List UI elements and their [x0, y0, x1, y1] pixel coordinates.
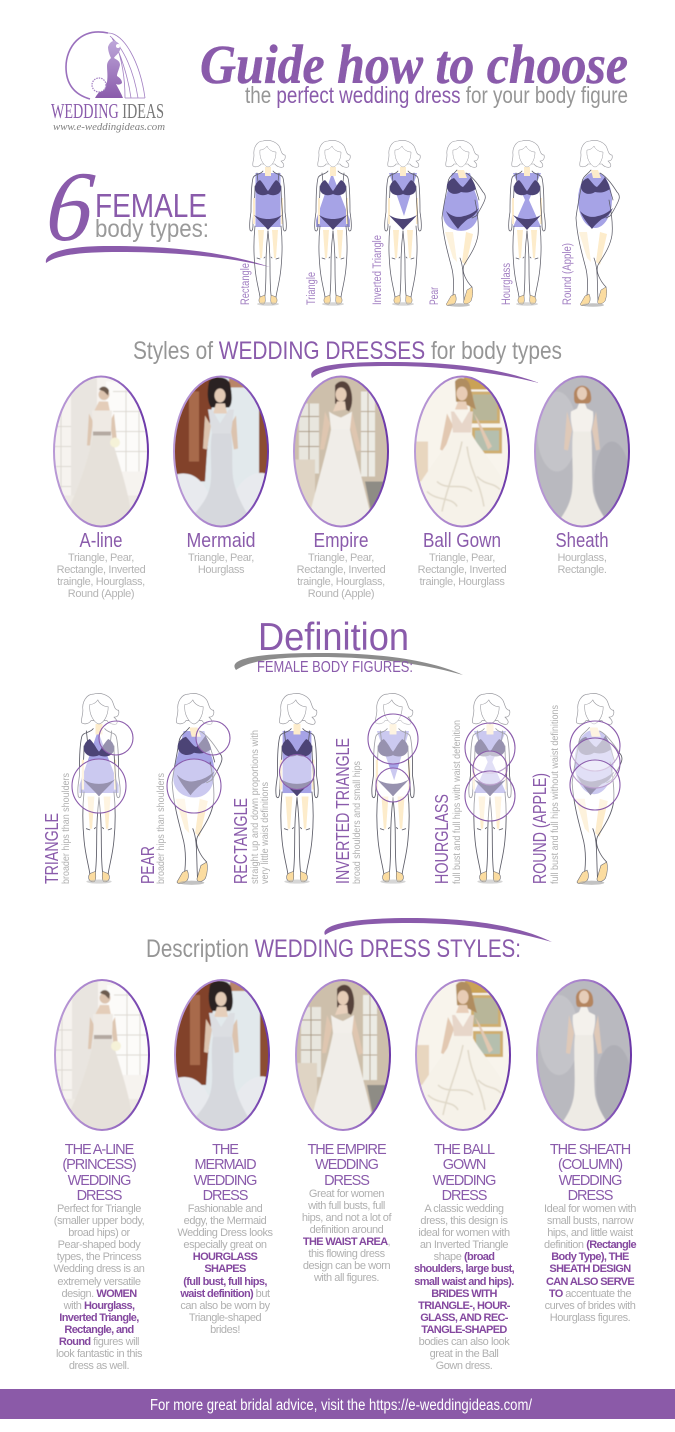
text: sheath description: Hourglass figures. [550, 1312, 631, 1324]
figure: round (apple) [576, 140, 619, 307]
text: a-line description: THE A-LINE [65, 1142, 135, 1158]
text: mermaid description: SHAPES [204, 1263, 246, 1275]
text: ball gown description: ideal for women with [418, 1227, 510, 1239]
text: sheath description: THE SHEATH [550, 1142, 631, 1158]
text: a-line: traingle, Hourglass, [57, 576, 145, 588]
text: empire description: definition around [310, 1224, 384, 1236]
text: ball gown description: shape (broad [434, 1251, 494, 1263]
text: sheath description: (COLUMN) [558, 1157, 622, 1173]
icon: bride silhouette in oval [66, 32, 145, 99]
panel: dress styles row [53, 376, 630, 600]
title: Guide how to choose [200, 34, 628, 95]
label: inverted triangle: Inverted Triangle [372, 235, 384, 305]
text: ball gown description: dress, this design is [420, 1215, 509, 1227]
text: mermaid description: brides! [210, 1324, 240, 1336]
text: empire description: DRESS [324, 1173, 369, 1189]
text: empire description: WEDDING [315, 1157, 379, 1173]
text: sheath description: TO accentuate the [549, 1288, 631, 1300]
label: rectangle: Rectangle [240, 263, 252, 305]
text: mermaid description: MERMAID [194, 1157, 256, 1173]
text: mermaid description [177, 1142, 274, 1336]
photo: mermaid dress [174, 979, 270, 1132]
label: pear definition [138, 773, 167, 884]
text: empire: Empire [314, 530, 368, 552]
label: pear definition: broader hips than shoulders [155, 773, 167, 884]
photo: a-line dress [53, 376, 149, 528]
figure: triangle [315, 140, 351, 306]
figure: hourglass [509, 140, 545, 306]
text: mermaid description: THE [212, 1142, 239, 1158]
label: round (apple): Round (Apple) [562, 243, 574, 305]
label: pear: Pear [429, 287, 441, 305]
text: a-line description: with Hourglass, [63, 1300, 135, 1312]
text: mermaid [186, 530, 256, 576]
text: empire description: Great for women [309, 1188, 384, 1200]
text: ball gown description: shoulders, large bust, [414, 1263, 515, 1275]
text: ball gown: Triangle, Pear, [429, 552, 495, 564]
text: ball gown description: WEDDING [433, 1173, 496, 1189]
panel: body figure definitions [42, 693, 622, 885]
label: round apple definition: full bust and full hips without waist definitions [549, 705, 561, 884]
figure: inverted triangle with circles [368, 693, 418, 884]
text: empire description: THE WAIST AREA, [303, 1236, 390, 1248]
label: round apple definition [530, 705, 561, 884]
figure: rectangle [250, 140, 286, 306]
text: ball gown description: A classic wedding [424, 1203, 504, 1215]
label: hourglass definition [432, 720, 463, 884]
text: empire description: with full busts, full [307, 1200, 385, 1212]
text: a-line description: look fantastic in this [56, 1348, 143, 1360]
text: mermaid description: (full bust, full hips, [183, 1276, 267, 1288]
text: mermaid: Triangle, Pear, [188, 552, 254, 564]
text: mermaid description: especially great on [183, 1239, 267, 1251]
label: hourglass: Hourglass [501, 263, 513, 305]
text: sheath: Hourglass, [557, 552, 607, 564]
label: pear definition: PEAR [138, 846, 158, 884]
text: empire: Rectangle, Inverted [297, 564, 386, 576]
text: a-line description: dress as well. [69, 1360, 130, 1372]
text: ball gown description: TRIANGLE-, HOUR- [418, 1300, 511, 1312]
text: a-line: Round (Apple) [68, 588, 134, 600]
text: empire: traingle, Hourglass, [297, 576, 385, 588]
figure: round apple with circles [570, 693, 622, 885]
heading: definition: FEMALE BODY FIGURES: [257, 659, 413, 676]
figure: pear with circles [167, 693, 230, 885]
figure: hourglass with circles [465, 693, 515, 884]
photo: sheath dress [534, 376, 630, 528]
label: triangle definition [42, 773, 72, 884]
heading: 6 female body types [35, 151, 270, 267]
text: a-line description: (smaller upper body, [54, 1215, 145, 1227]
text: empire description [302, 1142, 392, 1284]
text: empire: Triangle, Pear, [308, 552, 374, 564]
heading: 6 female body types: FEMALE [95, 187, 207, 224]
text: empire description: hips, and not a lot of [302, 1212, 392, 1224]
heading: styles of wedding dresses: Styles of WEDDING DRESSES for body types [133, 337, 562, 365]
text: a-line description: broad hips) or [68, 1227, 131, 1239]
heading: definition: Definition [258, 616, 409, 659]
text: a-line description: Pear-shaped body [58, 1239, 141, 1251]
photo: ball gown [414, 376, 510, 529]
text: a-line [57, 530, 146, 600]
text: ball gown description: GOWN [443, 1157, 486, 1173]
text: empire [297, 530, 386, 600]
photo: ball gown [415, 979, 511, 1132]
text: sheath description: DRESS [568, 1188, 613, 1204]
heading: 6 female body types: 6 [35, 151, 108, 262]
text: sheath description: Body Type), THE [551, 1251, 629, 1263]
label: hourglass definition: HOURGLASS [432, 794, 452, 884]
text: a-line description: DRESS [77, 1188, 122, 1204]
text: a-line description: Perfect for Triangle [57, 1203, 141, 1215]
text: ball gown description: Gown dress. [436, 1360, 493, 1372]
label: inverted triangle definition [333, 738, 363, 884]
text: empire: Round (Apple) [308, 588, 374, 600]
text: mermaid description: can also be worn by [180, 1300, 271, 1312]
photo: mermaid dress [173, 376, 269, 528]
label: triangle: Triangle [306, 272, 318, 305]
text: empire description: design can be worn [303, 1260, 390, 1272]
heading: description wedding dress styles: Description WEDDING DRESS STYLES: [146, 935, 521, 963]
text: empire description: with all figures. [313, 1272, 379, 1284]
text: mermaid description: Wedding Dress looks [177, 1227, 274, 1239]
heading: styles of wedding dresses [133, 337, 562, 383]
text: ball gown: Ball Gown [423, 530, 501, 552]
label: hourglass definition: full bust and full hips with waist defenition [451, 720, 463, 884]
figure: rectangle with circle [276, 693, 318, 884]
text: a-line: A-line [80, 530, 122, 552]
logo: Wedding Ideas [51, 32, 165, 133]
label: inverted triangle definition: broad shoulders and small hips [351, 761, 363, 884]
body figures row: six female body types [240, 140, 619, 307]
photo: empire dress [293, 376, 389, 528]
logo wordmark: WEDDING IDEAS [51, 99, 164, 123]
text: a-line description: Round figures will [59, 1336, 139, 1348]
label: rectangle definition [231, 730, 271, 884]
text: a-line description: design. WOMEN [61, 1288, 137, 1300]
footer band: For more great bridal advice, visit the https://e-weddingideas.com/ [150, 1397, 533, 1414]
text: mermaid description: Fashionable and [188, 1203, 263, 1215]
text: mermaid: Hourglass [198, 564, 245, 576]
text: a-line: Rectangle, Inverted [57, 564, 146, 576]
text: a-line description: Wedding dress is an [54, 1263, 145, 1275]
photo: empire dress [295, 979, 391, 1131]
text: a-line description [54, 1142, 145, 1372]
text: ball gown description: DRESS [442, 1188, 487, 1204]
text: ball gown description: GLASS, AND REC- [420, 1312, 509, 1324]
text: mermaid description: waist definition) but [179, 1288, 270, 1300]
text: empire description: THE EMPIRE [307, 1142, 387, 1158]
text: sheath description: CAN ALSO SERVE [546, 1276, 634, 1288]
label: triangle definition: broader hips than shoulders [60, 773, 72, 884]
text: mermaid: Mermaid [186, 530, 256, 552]
text: a-line description: extremely versatile [57, 1276, 141, 1288]
text: sheath description: WEDDING [559, 1173, 622, 1189]
text: sheath: Rectangle. [557, 564, 607, 576]
text: ball gown [418, 530, 507, 588]
text: ball gown description: bodies can also look [419, 1336, 510, 1348]
text: mermaid description: WEDDING [194, 1173, 257, 1189]
text: ball gown description: great in the Ball [430, 1348, 498, 1360]
text: a-line: Triangle, Pear, [68, 552, 134, 564]
text: sheath description: curves of brides with [545, 1300, 636, 1312]
text: ball gown: traingle, Hourglass [419, 576, 505, 588]
text: a-line description: Inverted Triangle, [59, 1312, 139, 1324]
label: round apple definition: ROUND (APPLE) [530, 773, 550, 884]
label: rectangle definition: straight up and down proportions with [249, 730, 261, 884]
label: inverted triangle definition: INVERTED TRIANGLE [333, 738, 353, 884]
figure: triangle with circles [72, 693, 133, 884]
label: triangle definition: TRIANGLE [42, 813, 62, 884]
text: mermaid description: DRESS [203, 1188, 248, 1204]
heading: definition [234, 616, 463, 676]
label: rectangle definition: very little waist definitions [259, 782, 271, 884]
text: ball gown description: THE BALL [434, 1142, 495, 1158]
logo url: www.e-weddingideas.com [53, 122, 165, 133]
footer band [0, 1389, 675, 1419]
text: ball gown description: BRIDES WITH [431, 1288, 497, 1300]
subtitle: the perfect wedding dress for your body figure [245, 82, 628, 108]
text: ball gown description: TANGLE-SHAPED [421, 1324, 507, 1336]
figure: pear [442, 140, 485, 307]
text: a-line description: (PRINCESS) [62, 1157, 136, 1173]
text: sheath description: definition (Rectangle [544, 1239, 636, 1251]
text: sheath description: small busts, narrow [547, 1215, 634, 1227]
text: mermaid description: Triangle-shaped [189, 1312, 261, 1324]
text: mermaid description: HOURGLASS [193, 1251, 258, 1263]
text: a-line description: Rectangle, and [64, 1324, 134, 1336]
text: ball gown description: an Inverted Triangle [420, 1239, 508, 1251]
text: a-line description: types, the Princess [57, 1251, 142, 1263]
text: sheath description: Ideal for women with [544, 1203, 636, 1215]
text: sheath description [544, 1142, 636, 1324]
text: sheath [556, 530, 608, 576]
text: ball gown: Rectangle, Inverted [418, 564, 507, 576]
text: ball gown description [414, 1142, 515, 1372]
panel: dress descriptions [54, 979, 636, 1372]
text: empire description: this flowing dress [308, 1248, 386, 1260]
photo: a-line dress [54, 979, 150, 1132]
figure: inverted triangle [385, 140, 421, 306]
photo: sheath dress [536, 979, 632, 1132]
text: sheath description: SHEATH DESIGN [549, 1263, 631, 1275]
text: a-line description: WEDDING [68, 1173, 131, 1189]
text: ball gown description: small waist and hips). [414, 1276, 514, 1288]
text: sheath description: hips, and little waist [547, 1227, 633, 1239]
text: sheath: Sheath [556, 530, 608, 552]
heading: 6 female body types: body types: [95, 215, 209, 243]
text: mermaid description: edgy, the Mermaid [184, 1215, 267, 1227]
heading: description wedding dress styles [146, 918, 552, 963]
label: rectangle definition: RECTANGLE [231, 798, 251, 884]
